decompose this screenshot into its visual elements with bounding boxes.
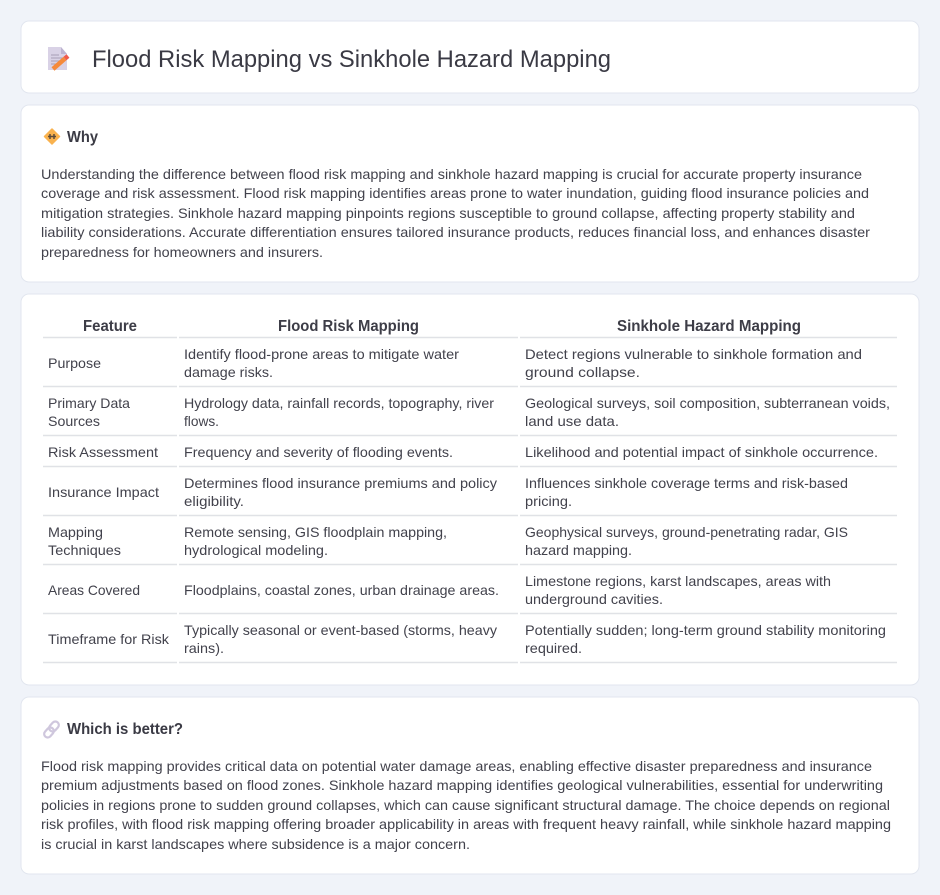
- icon: document with pencil: [48, 47, 68, 70]
- row: insurance impact: [48, 475, 848, 509]
- icon: warning diamond: [44, 129, 60, 144]
- row: timeframe for risk: Potentially sudden; long-term ground stability monitoring: [525, 622, 886, 638]
- row: primary data sources: Hydrology data, rainfall records, topography, river: [184, 395, 494, 411]
- row: areas covered: Limestone regions, karst landscapes, areas with: [525, 573, 831, 589]
- row: mapping techniques: Remote sensing, GIS floodplain mapping,: [184, 524, 447, 540]
- text block: which is better: risk profiles, with flood risk mapping offering broader applicability in areas with frequent heavy rainfall, while sinkhole hazard mapping: [41, 816, 891, 832]
- row: areas covered: [48, 573, 831, 607]
- row: mapping techniques: hazard mapping.: [525, 542, 632, 558]
- row: areas covered: Floodplains, coastal zones, urban drainage areas.: [184, 582, 499, 598]
- text block: why: coverage and risk assessment. Flood risk mapping identifies areas prone to water inundation, guiding flood insurance policies and: [41, 185, 869, 201]
- row: risk assessment: Frequency and severity of flooding events.: [184, 444, 453, 460]
- panel: which is better: [21, 697, 919, 874]
- row: primary data sources: Primary Data: [48, 395, 130, 411]
- panel: comparison table: [21, 294, 919, 685]
- row: purpose: ground collapse.: [525, 364, 640, 380]
- table header: Sinkhole Hazard Mapping: [617, 318, 801, 335]
- text block: why: Understanding the difference between flood risk mapping and sinkhole hazard mapping is crucial for accurate property insurance: [41, 166, 862, 182]
- text block: which is better: is crucial in karst landscapes where subsidence is a major concern.: [41, 836, 470, 852]
- row: timeframe for risk: Typically seasonal or event-based (storms, heavy: [184, 622, 497, 638]
- table grid lines: [43, 338, 897, 662]
- row: mapping techniques: Geophysical surveys, ground-penetrating radar, GIS: [525, 524, 848, 540]
- row: insurance impact: Insurance Impact: [48, 484, 159, 500]
- row: timeframe for risk: Timeframe for Risk: [48, 631, 170, 647]
- row: insurance impact: Determines flood insurance premiums and policy: [184, 475, 497, 491]
- row: primary data sources: Sources: [48, 413, 100, 429]
- row: risk assessment: Likelihood and potential impact of sinkhole occurrence.: [525, 444, 878, 460]
- icon: link: [43, 720, 60, 739]
- row: purpose: damage risks.: [184, 364, 273, 380]
- title: Flood Risk Mapping vs Sinkhole Hazard Mapping: [92, 46, 611, 73]
- table header: Flood Risk Mapping: [278, 318, 419, 335]
- text block: why: mitigation strategies. Sinkhole hazard mapping pinpoints regions susceptible to ground collapse, affecting property stability and: [41, 205, 855, 221]
- row: mapping techniques: Techniques: [48, 542, 121, 558]
- text block: why: [41, 166, 870, 260]
- row: primary data sources: flows.: [184, 413, 219, 429]
- row: timeframe for risk: rains).: [184, 640, 224, 656]
- table header: [83, 318, 801, 335]
- row: areas covered: Areas Covered: [48, 582, 140, 598]
- heading: which is better: Which is better?: [67, 721, 183, 738]
- text block: which is better: premium adjustments based on flood zones. Sinkhole hazard mapping identifies geological vulnerabilities, essential for underwriting: [41, 777, 883, 793]
- text block: which is better: Flood risk mapping provides critical data on potential water damage areas, enabling effective disaster preparedness and insurance: [41, 758, 872, 774]
- row: mapping techniques: Mapping: [48, 524, 103, 540]
- text block: why: preparedness for homeowners and insurers.: [41, 244, 323, 260]
- panel: header: [21, 21, 919, 93]
- row: mapping techniques: [48, 524, 848, 558]
- row: purpose: Identify flood-prone areas to mitigate water: [184, 346, 459, 362]
- row: insurance impact: Influences sinkhole coverage terms and risk-based: [525, 475, 848, 491]
- row: areas covered: underground cavities.: [525, 591, 663, 607]
- row: primary data sources: land use data.: [525, 413, 619, 429]
- row: purpose: Purpose: [48, 355, 101, 371]
- panel: why: [21, 105, 919, 282]
- row: timeframe for risk: [48, 622, 886, 656]
- text block: why: liability considerations. Accurate differentiation ensures tailored insurance products, reduces financial loss, and enhances disaster: [41, 224, 870, 240]
- row: insurance impact: eligibility.: [184, 493, 244, 509]
- text block: which is better: [41, 758, 891, 852]
- table header: Feature: [83, 318, 137, 335]
- text block: which is better: policies in regions prone to sudden ground collapses, which can cause significant structural damage. The choice depends on regional: [41, 797, 890, 813]
- heading: why: Why: [67, 129, 98, 146]
- row: primary data sources: Geological surveys, soil composition, subterranean voids,: [525, 395, 890, 411]
- row: risk assessment: Risk Assessment: [48, 444, 158, 460]
- row: insurance impact: pricing.: [525, 493, 572, 509]
- row: mapping techniques: hydrological modeling.: [184, 542, 328, 558]
- row: primary data sources: [48, 395, 890, 429]
- row: risk assessment: [48, 444, 878, 460]
- row: purpose: Detect regions vulnerable to sinkhole formation and: [525, 346, 862, 362]
- row: timeframe for risk: required.: [525, 640, 582, 656]
- row: purpose: [48, 346, 862, 380]
